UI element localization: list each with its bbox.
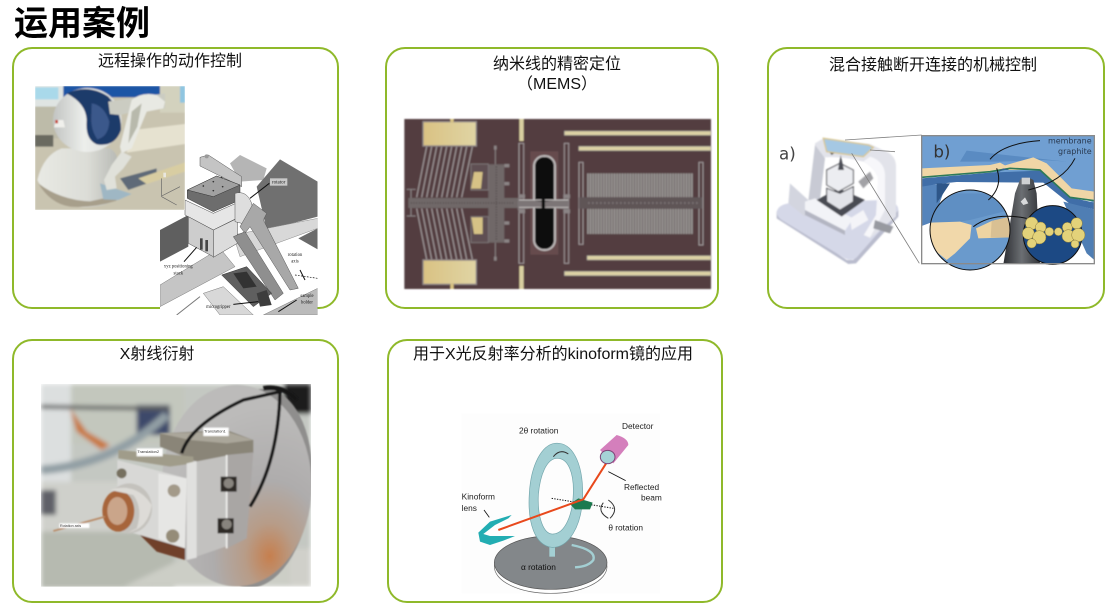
schematic: micromanipulator assembly <box>160 153 318 315</box>
diagram: kinoform reflectometry: Reflected <box>624 482 660 492</box>
picture: MEMS device <box>404 119 711 289</box>
panel: teleoperation motion control <box>12 47 339 309</box>
diagram: kinoform reflectometry: 2θ rotation <box>519 425 559 435</box>
diagram: kinoform reflectometry: α rotation <box>521 562 556 572</box>
schematic: micromanipulator assembly: rotator <box>272 181 286 186</box>
b) panel <box>922 136 1094 270</box>
panel: X-ray diffraction <box>12 339 339 603</box>
schematic: micromanipulator assembly: stack <box>174 271 184 276</box>
photo: haptic device <box>35 86 185 210</box>
panel 1 pictures <box>35 86 318 315</box>
diagram: kinoform reflectometry: beam <box>641 493 662 503</box>
diagram: kinoform reflectometry <box>462 413 662 593</box>
schematic: micromanipulator assembly: microgripper <box>206 305 231 310</box>
panel: kinoform lens application <box>387 339 723 603</box>
picture: break-junction a) and b): graphite <box>1058 147 1092 156</box>
diagram: kinoform reflectometry: θ rotation <box>608 522 643 532</box>
a) device <box>777 138 898 264</box>
panel: nanowire precision positioning <box>385 47 719 309</box>
diagram: kinoform reflectometry: Detector <box>622 421 654 431</box>
photo: X-ray diffraction stage <box>41 383 322 594</box>
schematic: micromanipulator assembly: rotation <box>288 253 303 258</box>
picture: break-junction a) and b): a) <box>779 144 796 163</box>
schematic: micromanipulator assembly: xyz positioning <box>164 265 193 270</box>
heading: nanowire positioning: 纳米线的精密定位 <box>493 56 621 73</box>
diagram: kinoform reflectometry: lens <box>462 503 477 513</box>
heading: nanowire positioning <box>493 55 621 93</box>
heading: kinoform: 用于X光反射率分析的kinoform镜的应用 <box>413 346 693 363</box>
picture: break-junction a) and b) <box>777 135 1094 270</box>
heading: X-ray diffraction: X射线衍射 <box>120 346 194 363</box>
schematic: micromanipulator assembly: holder <box>301 300 313 305</box>
heading: nanowire positioning: （MEMS） <box>517 76 597 93</box>
title: 运用案例 <box>14 5 150 43</box>
photo: X-ray diffraction stage: Translation1 <box>204 428 227 433</box>
photo: X-ray diffraction stage: Translation2 <box>137 449 160 454</box>
heading: break junction: 混合接触断开连接的机械控制 <box>829 57 1037 74</box>
diagram: kinoform reflectometry: Kinoform <box>462 491 495 501</box>
schematic: micromanipulator assembly: axis <box>291 260 299 265</box>
panel: hybrid contact break-junction <box>767 47 1105 309</box>
photo: X-ray diffraction stage: Rotation axis <box>60 524 81 528</box>
figures: all panel pictures <box>35 86 1095 594</box>
picture: break-junction a) and b): b) <box>933 142 950 161</box>
picture: break-junction a) and b): membrane <box>1048 136 1092 145</box>
heading: teleoperation: 远程操作的动作控制 <box>98 53 242 70</box>
schematic: micromanipulator assembly: sample <box>300 294 314 299</box>
